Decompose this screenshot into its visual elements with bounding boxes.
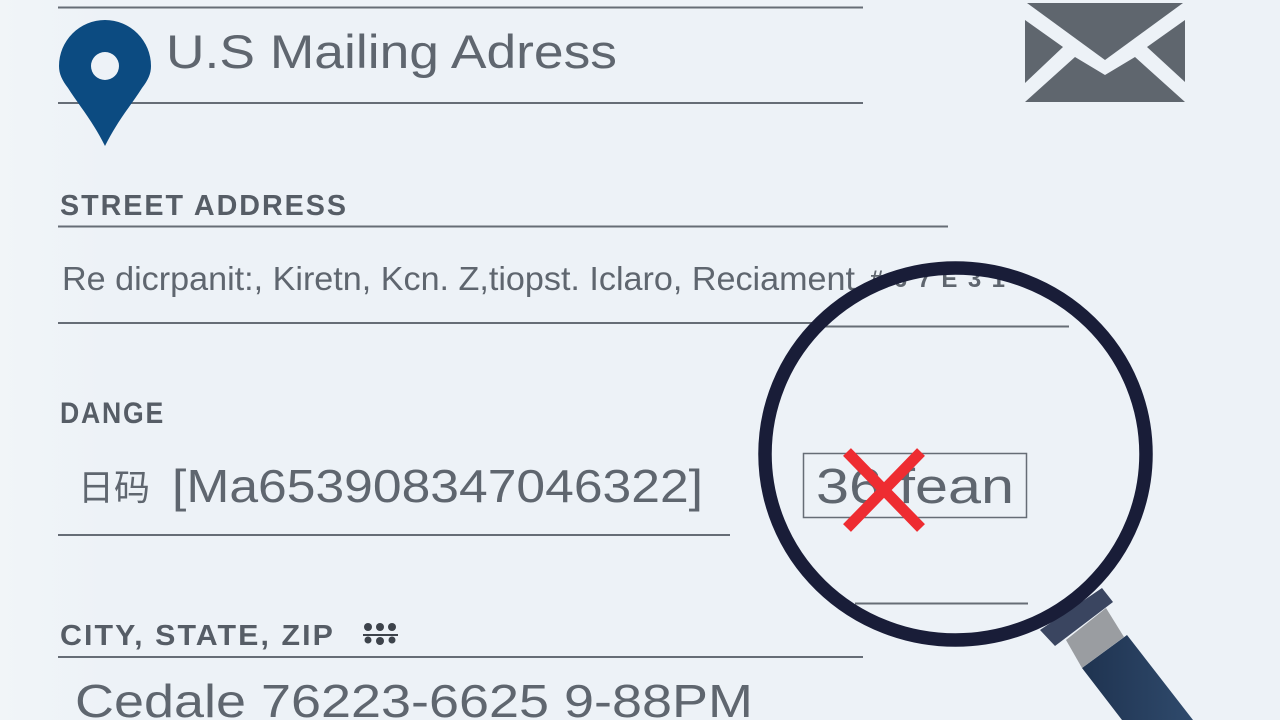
magnifier silver ferrule xyxy=(1066,608,1124,668)
label: city state zip: CITY, STATE, ZIP xyxy=(60,620,335,652)
magnifier handle grip xyxy=(1082,635,1193,720)
magnifier ring xyxy=(765,268,1146,640)
magnifying glass xyxy=(765,268,1193,720)
reference number: [Ma653908347046322] xyxy=(172,460,703,512)
partly hidden address characters: #67E31 xyxy=(870,266,1005,293)
icon: red x mark xyxy=(847,452,921,528)
icon: location pin xyxy=(59,20,151,146)
icon: envelope xyxy=(1025,3,1185,102)
boxed wrong value: 36 fean xyxy=(816,460,1014,514)
boxed wrong value xyxy=(804,454,1026,518)
street address value: Re dicrpanit:, Kiretn, Kcn. Z,tiopst. Iclaro, Reciament xyxy=(62,260,855,297)
label: dange: DANGE xyxy=(60,397,165,430)
label: street address: STREET ADDRESS xyxy=(60,190,348,222)
icon: small glyph cluster xyxy=(363,623,398,645)
title: U.S Mailing Adress xyxy=(166,25,617,78)
magnifier collar xyxy=(1040,588,1113,646)
garbled glyphs: 日码 xyxy=(78,467,150,508)
